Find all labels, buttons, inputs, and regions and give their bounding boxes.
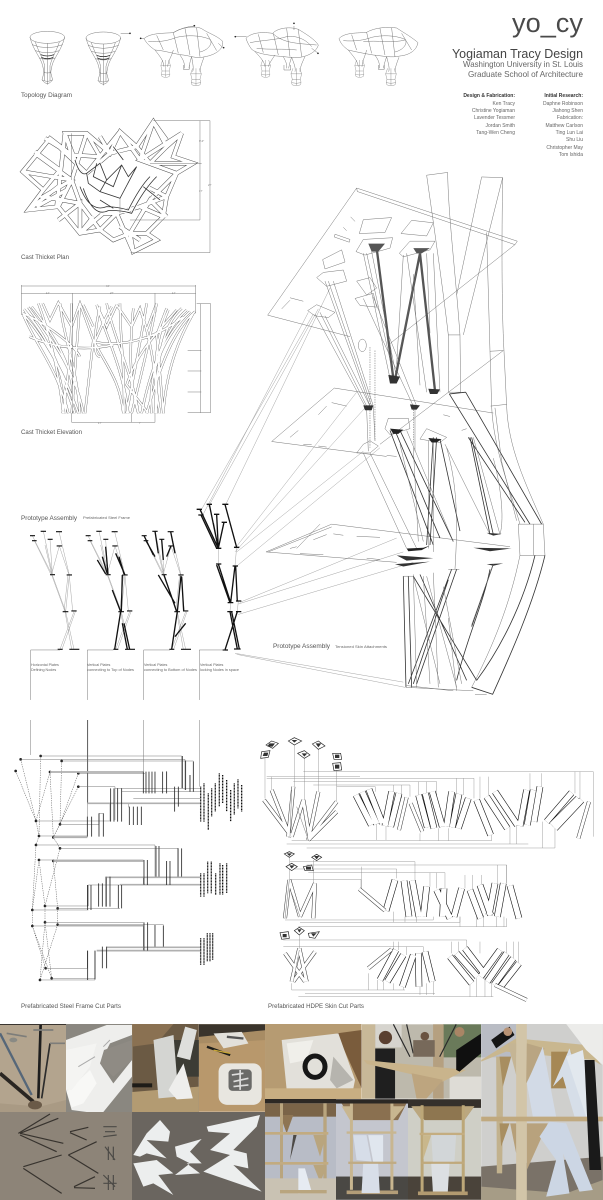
plan dimension labels: 9'-0" xyxy=(199,139,204,143)
elevation dimension labels: 14' xyxy=(172,291,176,295)
assembly stage 3 xyxy=(142,531,191,649)
captions for assembly stages: Vertical Plates xyxy=(200,663,224,667)
captions for assembly stages: Vertical Plates xyxy=(144,663,168,667)
main exploded prototype assembly xyxy=(200,172,545,694)
photo: white skin pieces on table xyxy=(132,1024,199,1112)
credits: design and fabrication: Tang-Wen Cheng xyxy=(476,130,515,136)
stage frames xyxy=(31,650,225,700)
plan dimension labels: 27' xyxy=(208,183,212,187)
assembly stage 1 xyxy=(30,531,79,649)
leader lines xyxy=(265,743,593,997)
funnel 1 xyxy=(30,31,65,85)
label: prefabricated steel frame cut parts: Prefabricated Steel Frame Cut Parts xyxy=(21,1003,121,1010)
flat cut skin strips xyxy=(356,787,589,1000)
credits: design and fabrication: Jordan Smith xyxy=(486,123,515,129)
assembly stage 4 xyxy=(197,504,241,650)
node plates xyxy=(261,738,342,939)
cut frame sticks xyxy=(87,756,193,980)
photo: prototype stage two xyxy=(336,1099,408,1200)
credits: initial research and fabrication: Fabrication: xyxy=(557,115,583,121)
label: prototype assembly tensioned skin attachments: Prototype Assembly xyxy=(273,643,331,650)
label: prototype assembly prefabricated steel frame xyxy=(21,515,130,522)
credits: initial research and fabrication: Tom Ishida xyxy=(559,152,583,158)
elevation dimension labels: 7' xyxy=(139,421,141,425)
elevation dimension labels: 17' xyxy=(98,421,102,425)
leader lines from frame to skin xyxy=(200,288,413,687)
label: topology diagram: Topology Diagram xyxy=(21,92,72,99)
label: prefabricated HDPE skin cut parts: Prefabricated HDPE Skin Cut Parts xyxy=(268,1003,364,1010)
credits: initial research and fabrication xyxy=(543,93,583,158)
elevation dimension labels: 14' xyxy=(46,291,50,295)
plan dimension lines xyxy=(71,121,210,253)
credits: initial research and fabrication: Shu Liu xyxy=(566,137,583,143)
steel frame cut parts diagram xyxy=(14,720,242,981)
photo: steel rods close-up xyxy=(0,1024,66,1112)
elevation dimension labels xyxy=(46,284,176,425)
title: yo_cy: yo_cy xyxy=(512,8,583,38)
photo: team assembling prototype xyxy=(362,1024,481,1099)
two lobe form 1 xyxy=(140,25,224,86)
lower plate xyxy=(266,524,510,562)
credits: initial research and fabrication: Jiahong Shen xyxy=(552,108,583,114)
cast thicket elevation drawing xyxy=(21,285,211,422)
captions for assembly stages xyxy=(31,663,239,672)
captions for assembly stages: locking Nodes in space xyxy=(200,668,239,672)
credits: initial research and fabrication: Christopher May xyxy=(546,145,583,151)
heading: firm name: Yogiaman Tracy Design xyxy=(452,47,583,61)
photo: prototype stage one xyxy=(265,1099,336,1200)
elevation dimension labels: 44' xyxy=(106,284,110,288)
credits: design and fabrication xyxy=(463,93,515,136)
elevation dimension labels: 27' xyxy=(110,291,114,295)
credits: design and fabrication: Ken Tracy xyxy=(492,101,515,107)
funnel 2 xyxy=(86,32,131,85)
node segments between lower plate and legs xyxy=(518,524,545,555)
vertical connector lines from assemblies xyxy=(31,720,199,787)
label: cast thicket plan: Cast Thicket Plan xyxy=(21,254,70,261)
captions for assembly stages: connecting to Top of Nodes xyxy=(87,668,134,672)
dashed frame xyxy=(16,756,78,980)
credits: initial research and fabrication: Daphne Robinson xyxy=(543,101,583,107)
upper plate xyxy=(268,188,517,344)
captions for assembly stages: Horizontal Plates xyxy=(31,663,59,667)
mid plate xyxy=(272,351,503,456)
captions for assembly stages: Defining Nodes xyxy=(31,668,56,672)
captions for assembly stages: Vertical Plates xyxy=(87,663,111,667)
photo: full scale prototype close-up xyxy=(481,1024,603,1200)
label: cast thicket elevation: Cast Thicket Elevation xyxy=(21,429,83,436)
label: prototype assembly prefabricated steel frame: Prototype Assembly xyxy=(21,515,78,522)
hatched cut stacks xyxy=(201,773,242,965)
lower right skin panels xyxy=(472,555,545,694)
photo: white zigzag skin close-up xyxy=(66,1024,132,1112)
two lobe form 2 xyxy=(234,22,319,86)
photo: steel frame parts laid out xyxy=(0,1112,132,1200)
cast thicket plan drawing xyxy=(23,121,210,253)
credits: initial research and fabrication: Matthew Carlson xyxy=(545,123,583,129)
two lobe form 3 xyxy=(339,27,418,86)
photo: white skin parts laid out xyxy=(132,1112,265,1200)
mid skin members xyxy=(357,418,447,453)
subheading: school: Graduate School of Architecture xyxy=(468,69,583,79)
upper skin members dark xyxy=(377,248,435,390)
plan dimension labels: 17' xyxy=(199,189,203,193)
credits: design and fabrication: Lavender Tessmer xyxy=(474,115,515,121)
assembled skin figures xyxy=(264,787,337,982)
credits: design and fabrication: Design & Fabrication: xyxy=(463,93,515,99)
title block xyxy=(452,8,583,79)
left skin members xyxy=(308,270,417,451)
frame assembly diagrams xyxy=(30,504,241,700)
large upper beams xyxy=(427,172,543,524)
photo: white box with black ring xyxy=(265,1024,362,1099)
credits: initial research and fabrication: Initial Research: xyxy=(544,93,583,99)
lower leg cluster xyxy=(403,569,477,687)
photo strip xyxy=(0,1024,603,1200)
label: prototype assembly tensioned skin attachments xyxy=(273,643,387,650)
long diagonal skin panel xyxy=(449,392,542,524)
captions for assembly stages: connecting to Bottom of Nodes xyxy=(144,668,197,672)
subheading: university: Washington University in St. Louis xyxy=(463,59,583,69)
node platters at lower plate xyxy=(395,533,512,567)
frame nodes xyxy=(14,755,80,981)
credits: design and fabrication: Christine Yogiaman xyxy=(472,108,515,114)
elevation dimension lines xyxy=(21,285,211,422)
photo: prototype stage three xyxy=(408,1099,481,1200)
leaders xyxy=(21,756,200,980)
label: prototype assembly tensioned skin attachments: Tensioned Skin Attachments xyxy=(335,645,387,649)
node dark hubs xyxy=(363,375,440,410)
upper node plates xyxy=(356,238,435,257)
plan dimension labels xyxy=(199,139,212,193)
assembly stage 2 xyxy=(86,531,135,649)
HDPE skin cut parts diagram xyxy=(261,738,593,1000)
label: prototype assembly prefabricated steel frame: Prefabricated Steel Frame xyxy=(83,516,130,520)
topology diagram xyxy=(30,22,418,86)
credits: initial research and fabrication: Ting Lun Lai xyxy=(556,130,583,136)
photo: white plate on plywood xyxy=(199,1024,265,1112)
thick bundles xyxy=(50,772,200,951)
